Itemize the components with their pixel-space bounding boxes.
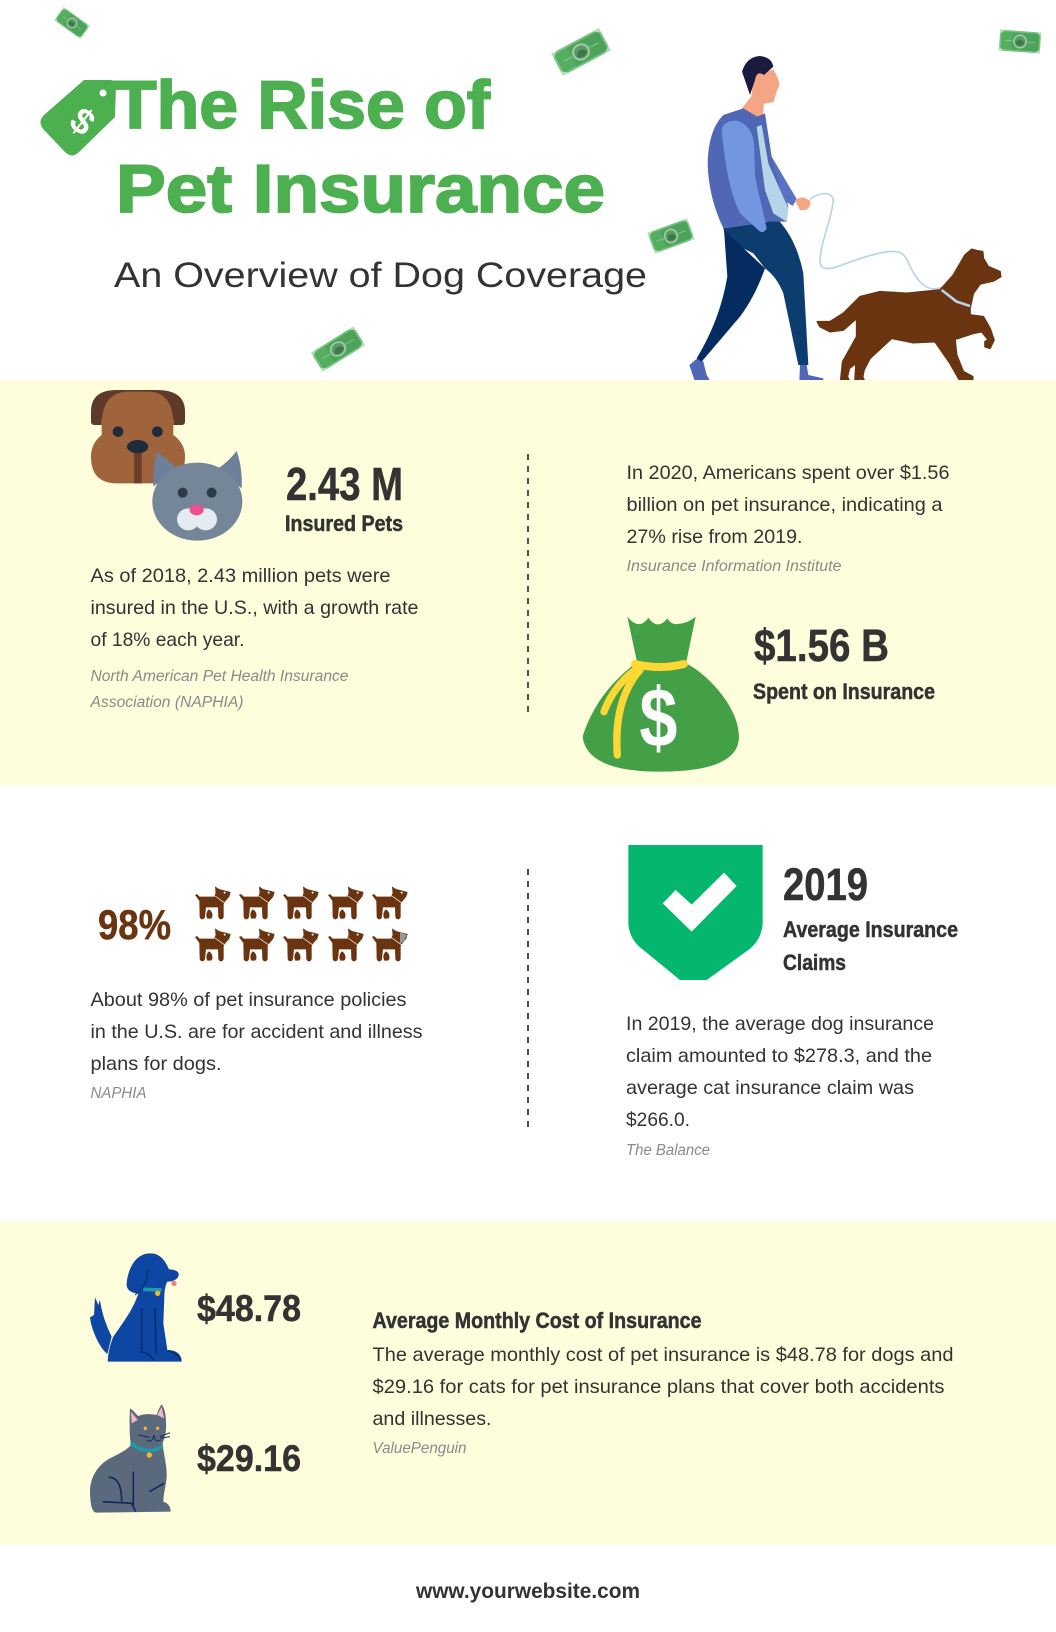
icon: green price tag	[40, 80, 116, 156]
panel: monthly cost	[0, 1221, 1056, 1545]
text: spending description: 27% rise from 2019.	[626, 526, 802, 548]
text: monthly cost description: The average monthly cost of pet insurance is $48.78 for dogs and	[372, 1344, 954, 1366]
icon: money bag	[583, 617, 739, 772]
text: monthly cost description: and illnesses.	[372, 1408, 492, 1430]
title: The Rise of	[114, 67, 490, 143]
text: claims description: In 2019, the average dog insurance	[626, 1013, 934, 1035]
title	[114, 67, 605, 227]
panel: insured pets and spending	[0, 380, 1056, 785]
text: insured pets description: insured in the U.S., with a growth rate	[90, 597, 418, 619]
stat: 2.43 M: 2.43 M	[286, 458, 403, 510]
icon: money bill top centre	[551, 28, 611, 76]
text: policies description: plans for dogs.	[90, 1053, 222, 1075]
icon: grey cat	[90, 1404, 171, 1513]
text: monthly cost description	[372, 1308, 954, 1457]
pictogram: ten dogs, 98 percent filled	[195, 886, 408, 961]
icon: blue dog	[90, 1253, 182, 1362]
text: insured pets description	[89, 565, 418, 711]
text: claims description: claim amounted to $278.3, and the	[626, 1045, 932, 1067]
person	[689, 56, 823, 382]
text: policies description: in the U.S. are for accident and illness	[90, 1021, 423, 1043]
stat: 2019 average claims: 2019	[783, 859, 868, 910]
text: spending description: Insurance Information Institute	[626, 558, 842, 575]
text: claims description: The Balance	[626, 1142, 710, 1159]
icon: money bill by person	[648, 218, 694, 254]
text: insured pets description: As of 2018, 2.43 million pets were	[90, 565, 390, 587]
stat: 2019 average claims: Average Insurance	[783, 917, 958, 942]
text: insured pets description: of 18% each year.	[90, 629, 244, 651]
text: claims description	[626, 1013, 934, 1159]
stat: 2.43 M: Insured Pets	[285, 511, 403, 536]
subtitle: An Overview of Dog Coverage	[114, 256, 647, 295]
icon: money bill top left	[54, 7, 90, 39]
icon: green price tag: $	[62, 99, 103, 143]
panel: policies and claims	[90, 845, 958, 1159]
icon: dog and cat faces	[91, 390, 242, 541]
text: monthly cost description: ValuePenguin	[372, 1440, 466, 1457]
text: insured pets description: Association (NAPHIA)	[89, 694, 244, 711]
stat: 2019 average claims	[783, 859, 958, 975]
stat: $29.16: $29.16	[197, 1438, 301, 1479]
stat: 2019 average claims: Claims	[783, 950, 846, 975]
text: claims description: average cat insurance claim was	[626, 1077, 914, 1099]
text: spending description	[626, 462, 950, 575]
footer: website: www.yourwebsite.com	[415, 1580, 640, 1603]
text: spending description: In 2020, Americans spent over $1.56	[626, 462, 950, 484]
title: Pet Insurance	[116, 151, 605, 227]
stat: 98%: 98%	[98, 901, 171, 948]
stat: $1.56 B	[753, 620, 935, 704]
stat: $1.56 B: $1.56 B	[754, 620, 889, 671]
icon: money bag: $	[639, 672, 677, 765]
illustration: person walking dog	[689, 56, 1001, 382]
leash	[810, 194, 942, 289]
panel: header	[40, 7, 1041, 382]
text: monthly cost description: $29.16 for cats for pet insurance plans that cover both accidents	[372, 1376, 945, 1398]
icon: green shield with check	[628, 845, 763, 980]
text: monthly cost description: Average Monthly Cost of Insurance	[372, 1308, 702, 1333]
stat: $48.78: $48.78	[197, 1288, 301, 1329]
stat: $1.56 B: Spent on Insurance	[753, 679, 935, 704]
text: insured pets description: North American Pet Health Insurance	[90, 668, 349, 685]
dog	[817, 249, 1001, 381]
text: claims description: $266.0.	[626, 1109, 690, 1131]
text: policies description: NAPHIA	[90, 1085, 146, 1102]
text: spending description: billion on pet insurance, indicating a	[626, 494, 943, 516]
text: policies description: About 98% of pet insurance policies	[90, 989, 407, 1011]
icon: money bill below subtitle	[311, 326, 365, 372]
icon: money bill top right	[999, 30, 1041, 53]
stat: 2.43 M	[285, 458, 403, 536]
collar	[942, 290, 970, 306]
text: policies description	[90, 989, 423, 1102]
